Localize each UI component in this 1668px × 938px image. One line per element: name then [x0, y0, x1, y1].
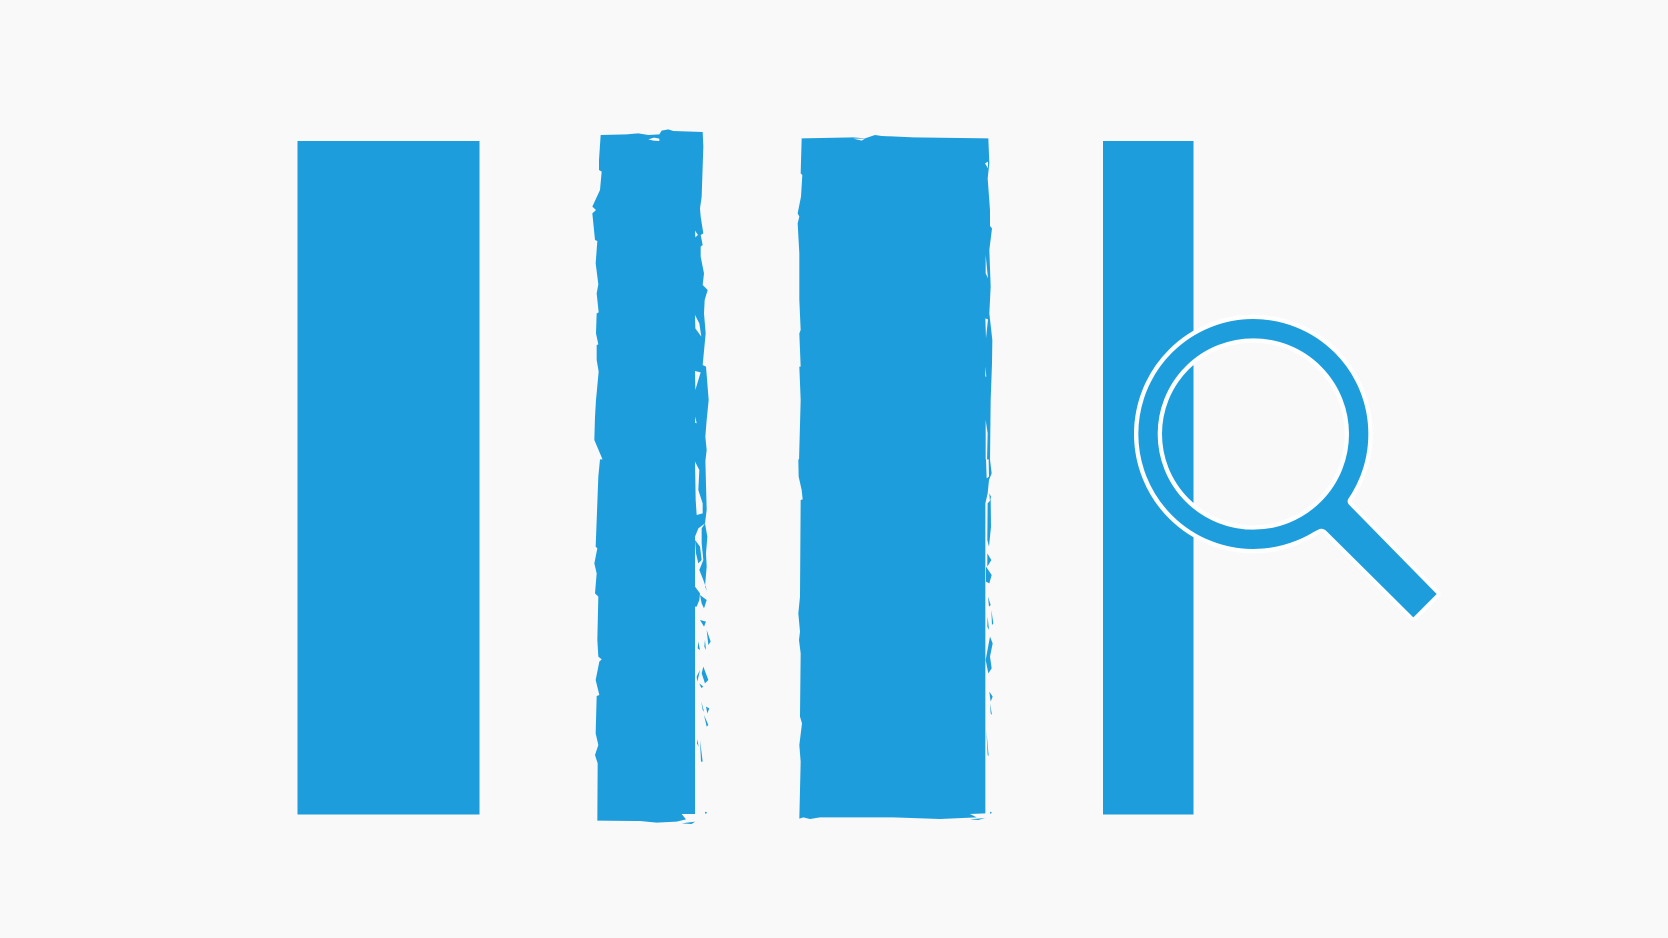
icon: magnifying glass — [1148, 329, 1437, 617]
bar 4: narrow solid rectangle — [1103, 141, 1194, 814]
bar 3: wide rough brush-stroke bar — [798, 135, 993, 820]
bar 1: solid rectangle — [298, 141, 480, 814]
bar 2: rough brush-stroke bar — [592, 129, 711, 824]
